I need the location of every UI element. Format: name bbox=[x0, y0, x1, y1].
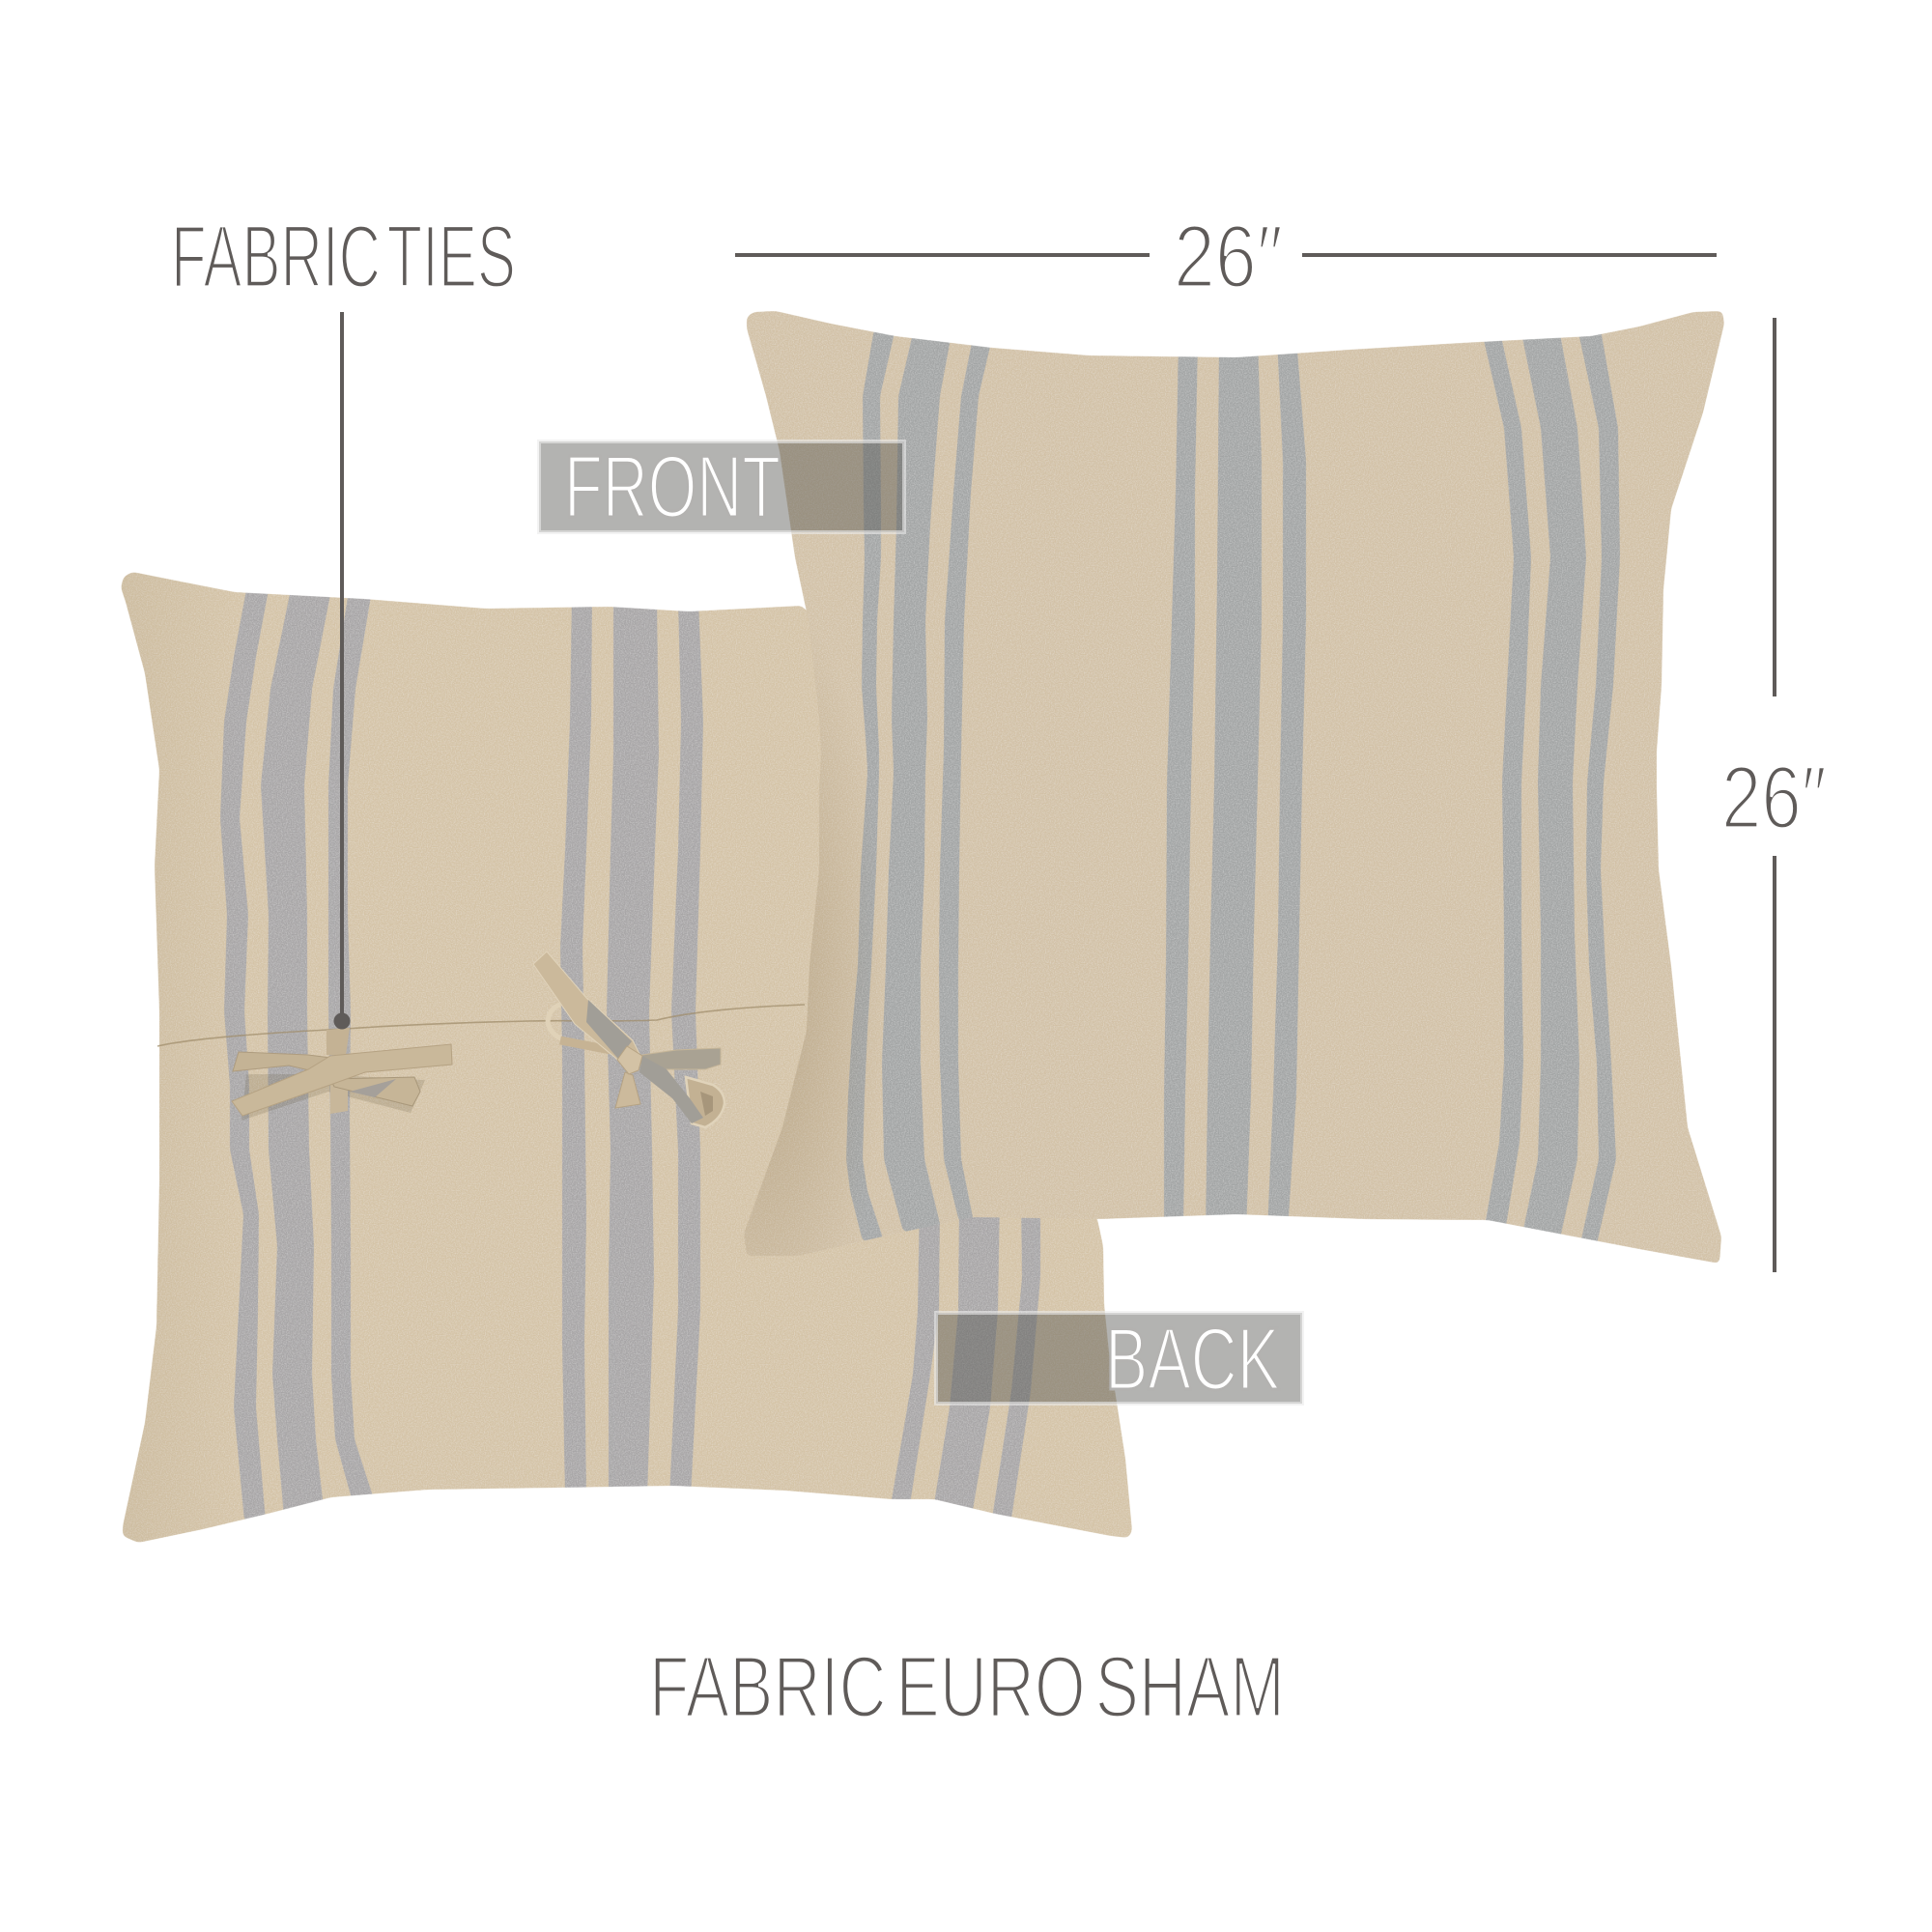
back label box bbox=[936, 1313, 1302, 1404]
front pillow left stripes bbox=[846, 328, 992, 1241]
front pillow fabric bbox=[715, 290, 1748, 1285]
tie strap long bbox=[232, 1044, 452, 1116]
height value: 26″ bbox=[1721, 749, 1827, 847]
bottom tab bbox=[615, 1072, 640, 1108]
back label text: BACK bbox=[1105, 1311, 1280, 1408]
front pillow left shading bbox=[744, 738, 862, 1256]
height line bottom bbox=[1773, 856, 1776, 1272]
lower right loop bbox=[686, 1077, 724, 1127]
back pillow bbox=[97, 551, 1159, 1565]
strap right upper bbox=[639, 1048, 721, 1069]
front label text: FRONT bbox=[564, 439, 781, 536]
height dimension bbox=[1721, 318, 1827, 1272]
label: back bbox=[936, 1311, 1302, 1408]
strap band bbox=[560, 1040, 611, 1050]
leader stroke bbox=[340, 312, 344, 1021]
back pillow centre stripes bbox=[560, 594, 703, 1497]
left fabric tie bow bbox=[232, 1028, 452, 1121]
loop inner stripe bbox=[350, 1079, 396, 1097]
bow shadow bbox=[242, 1074, 425, 1121]
width line left bbox=[735, 253, 1150, 257]
front label box bbox=[539, 441, 904, 532]
back pillow seam bbox=[157, 1005, 805, 1046]
label: front bbox=[539, 439, 904, 536]
loop inner shadow bbox=[700, 1092, 713, 1116]
title: fabric euro sham: FABRIC EURO SHAM bbox=[649, 1639, 1285, 1736]
width value: 26″ bbox=[1174, 208, 1283, 306]
long strap bbox=[533, 952, 642, 1072]
tie strap upper left bbox=[233, 1052, 330, 1075]
lower strap grey bbox=[639, 1056, 703, 1123]
tie loop lower right bbox=[330, 1077, 420, 1106]
front pillow bbox=[744, 311, 1724, 1264]
back pillow fabric bbox=[97, 551, 1159, 1565]
width dimension bbox=[735, 208, 1717, 306]
height line top bbox=[1773, 318, 1776, 696]
front pillow right stripes bbox=[1480, 319, 1620, 1248]
fabric ties leader line bbox=[334, 312, 350, 1030]
back pillow edge shading bbox=[122, 573, 141, 1542]
strap loop left bbox=[548, 1005, 609, 1049]
back pillow right stripes bbox=[892, 1217, 1040, 1517]
back pillow left stripes bbox=[220, 580, 375, 1521]
heading: fabric ties: FABRIC TIES bbox=[171, 208, 516, 306]
width line right bbox=[1302, 253, 1717, 257]
front pillow centre stripes bbox=[1164, 338, 1306, 1232]
leader dot bbox=[334, 1012, 350, 1030]
knot bbox=[617, 1046, 642, 1074]
tie tab top bbox=[327, 1028, 350, 1055]
right fabric tie bow bbox=[533, 952, 724, 1127]
tie tab bottom bbox=[330, 1084, 348, 1114]
long strap grey section bbox=[586, 1000, 632, 1059]
